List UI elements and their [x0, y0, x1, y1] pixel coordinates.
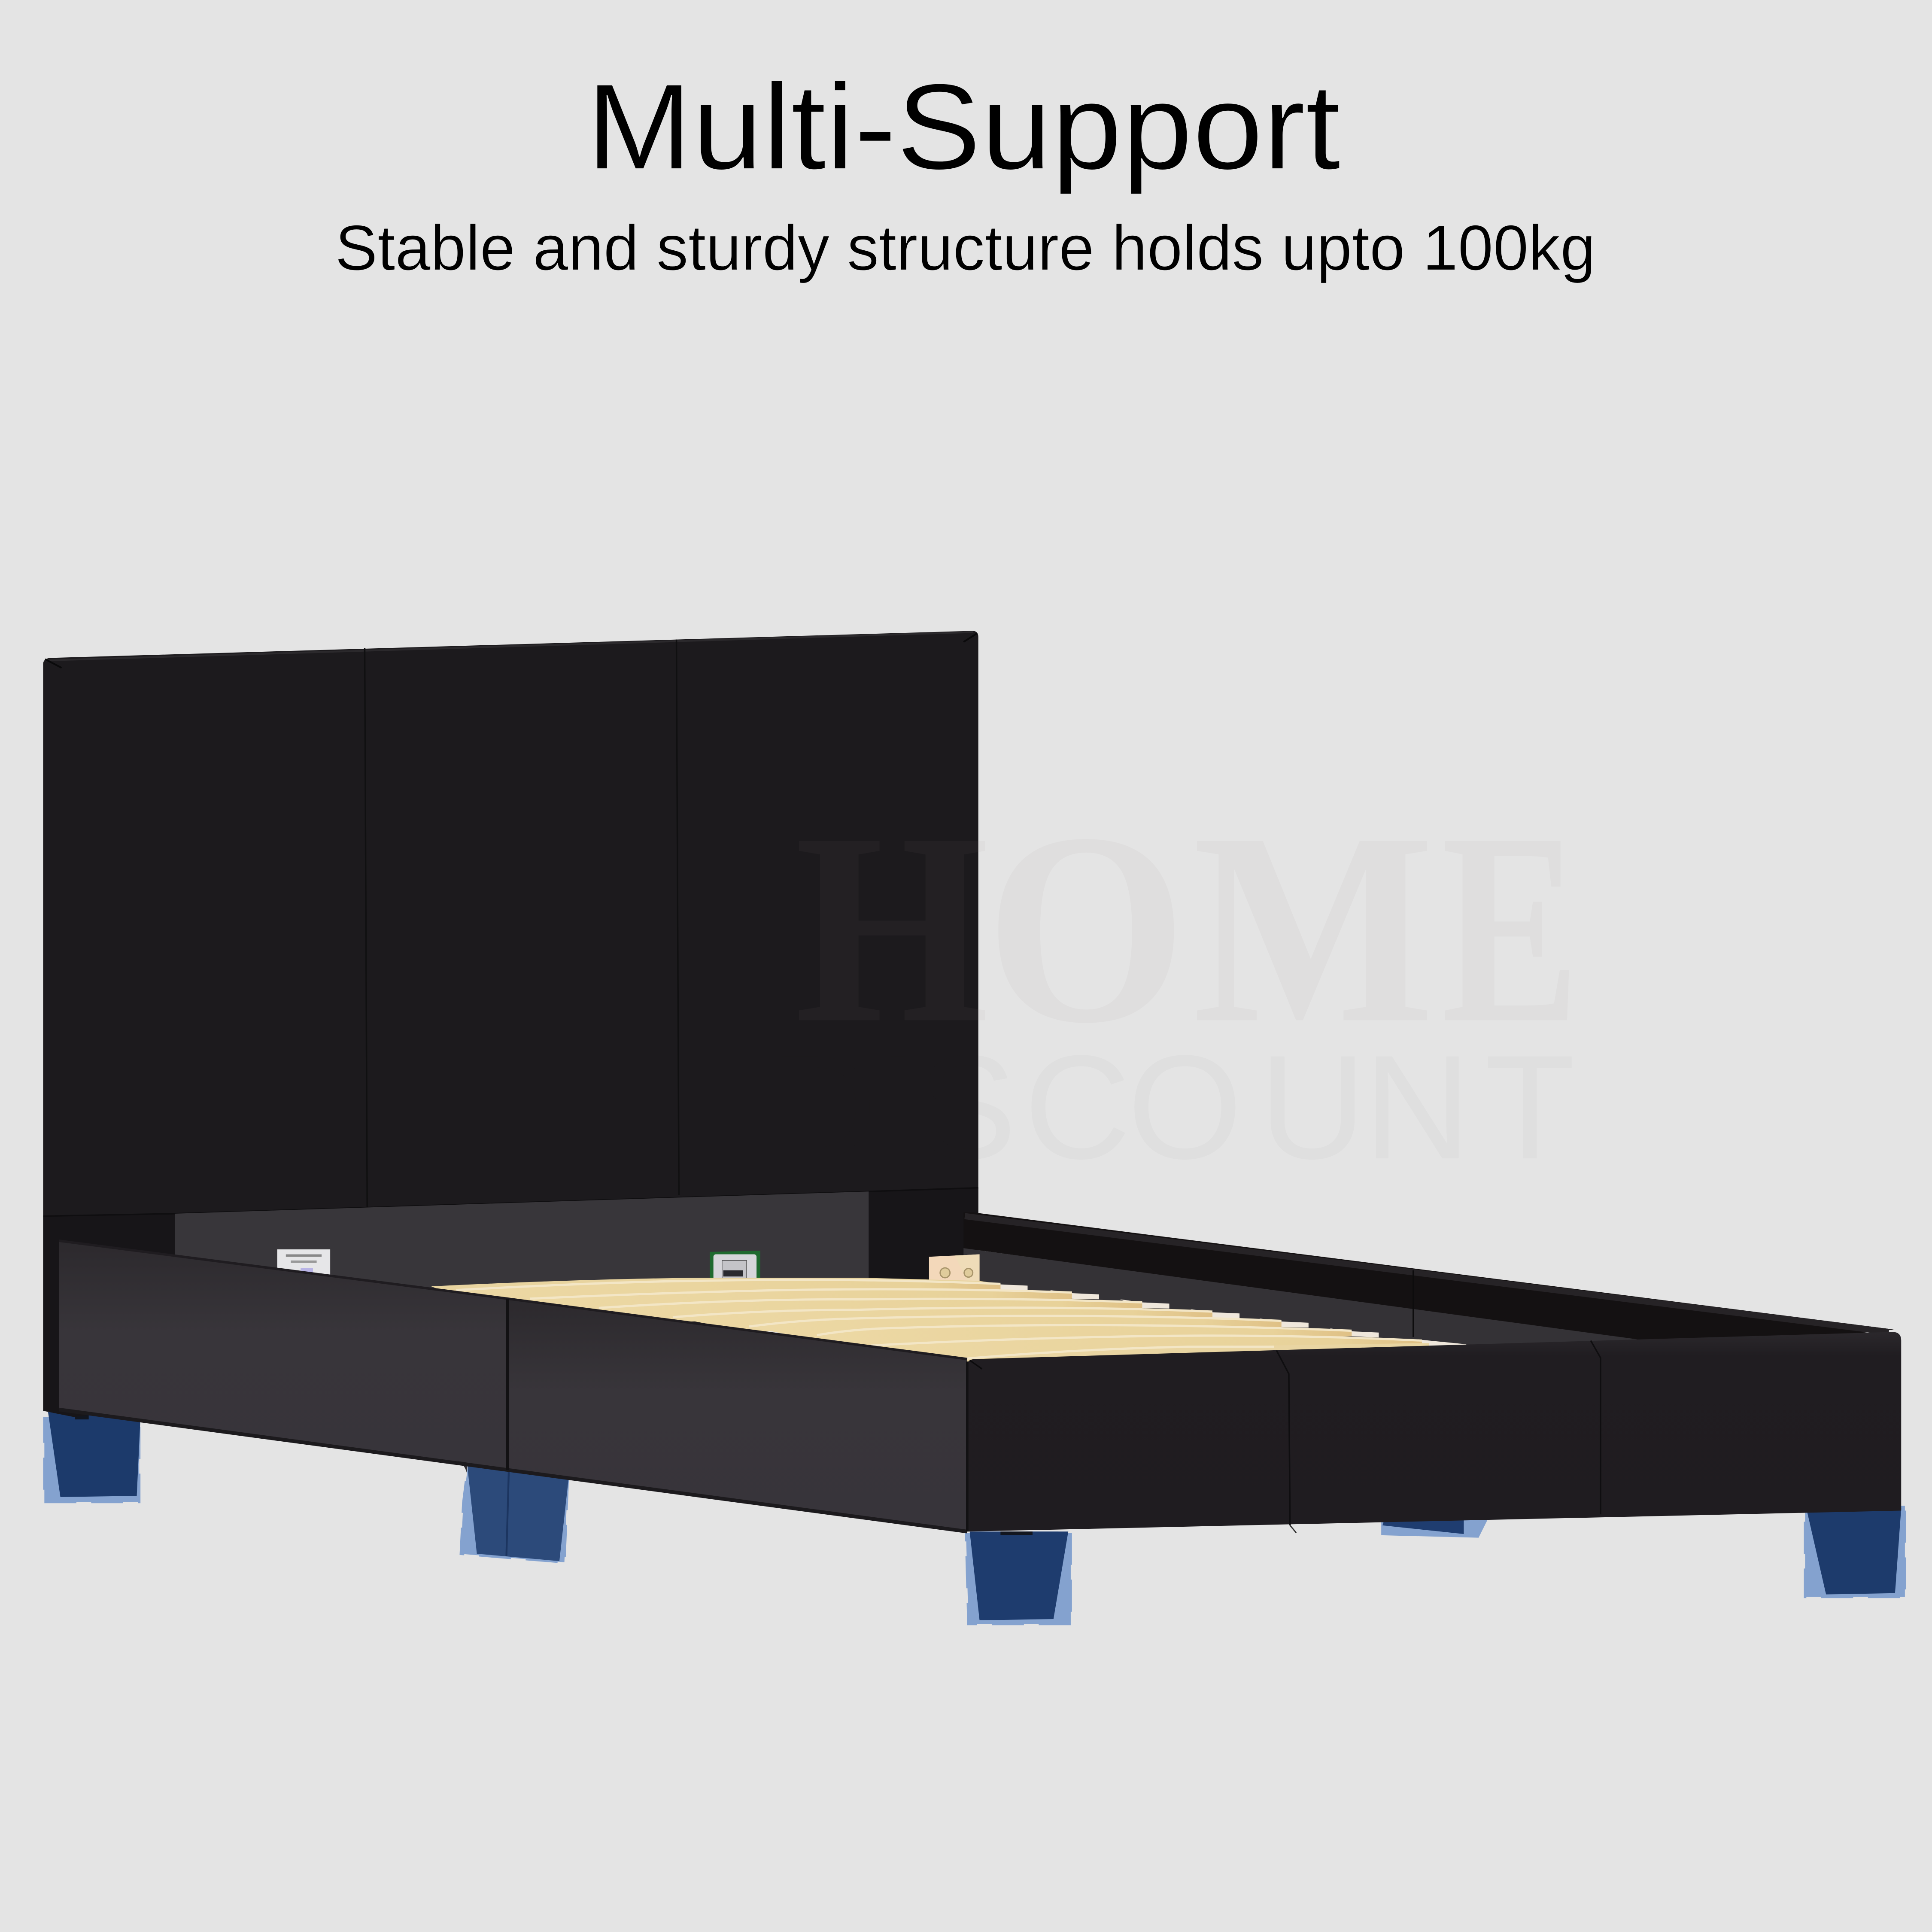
- slat end tabs: [978, 1281, 1466, 1347]
- watermark: DISCOUNT: DISCOUNT: [770, 1024, 1575, 1190]
- wooden slats: [431, 1278, 1466, 1365]
- far side rail: [963, 1212, 1894, 1349]
- icon: hidden back leg: [1381, 1518, 1488, 1538]
- near side rail: [59, 1241, 967, 1531]
- watermark: HOME: H: [795, 776, 990, 1079]
- subtitle: Stable and sturdy structure holds upto 100kg: [335, 212, 1596, 284]
- bed frame: [43, 631, 1906, 1625]
- watermark: HOME: M: [1193, 776, 1434, 1079]
- slat highlights: [456, 1280, 1422, 1359]
- label sticker: [277, 1249, 330, 1286]
- foot board: [967, 1332, 1901, 1533]
- panel: linen headboard insert: [175, 1191, 869, 1291]
- headboard: [43, 631, 978, 1417]
- title: Multi-Support: [586, 59, 1341, 195]
- watermark: HOME: O: [986, 776, 1187, 1079]
- watermark: HOME: E: [1442, 776, 1580, 1079]
- watermark: HOME: [795, 776, 1580, 1079]
- green sticker: [710, 1251, 760, 1284]
- icon: right corner leg: [1804, 1504, 1906, 1598]
- icon: middle leg: [459, 1463, 569, 1564]
- icon: front corner leg: [965, 1531, 1072, 1625]
- icon: rear-left leg: [43, 1412, 140, 1503]
- wooden corner block: [929, 1255, 980, 1284]
